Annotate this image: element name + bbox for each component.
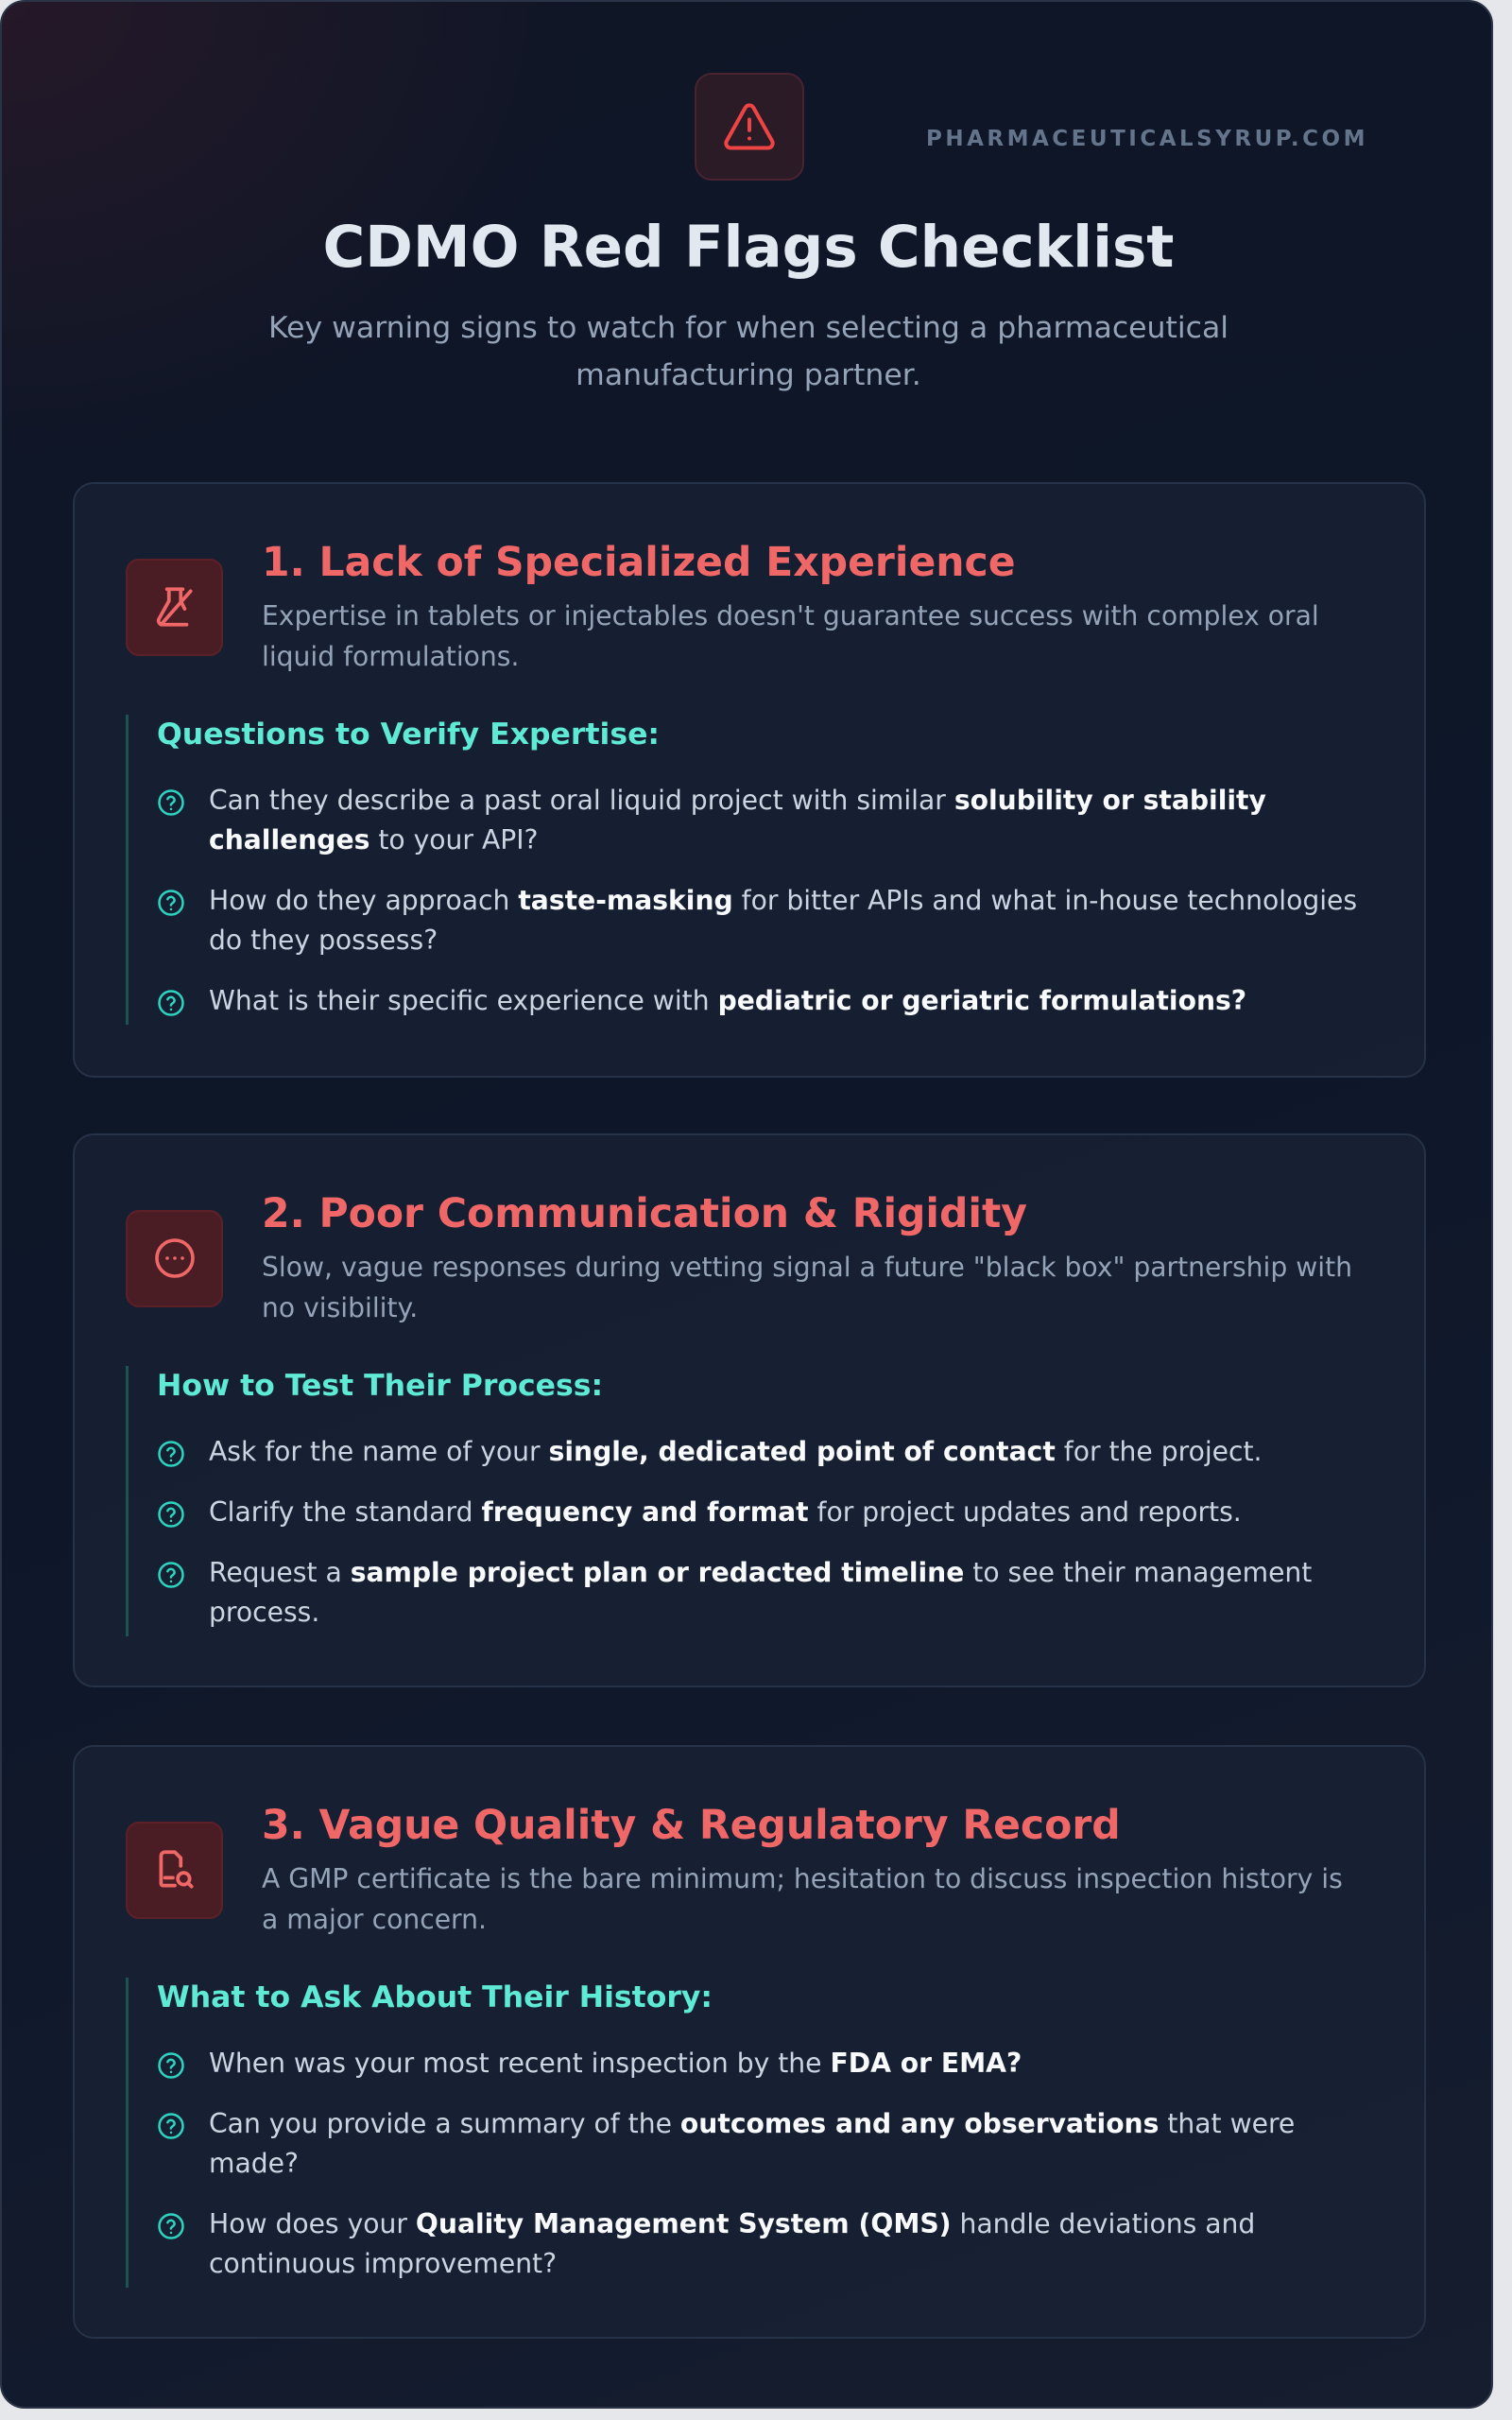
- panel: card 2: [73, 1133, 1426, 1687]
- questions block 1: Questions to Verify Expertise:: [157, 717, 660, 752]
- card 2 header: Slow, vague responses during vetting signal a future "black box" partnership with no visibility.: [262, 1252, 1352, 1323]
- questions block 3: What to Ask About Their History:: [157, 1980, 713, 2014]
- questions block 1: What is their specific experience with pediatric or geriatric formulations?: [209, 985, 1246, 1016]
- card 3 header: [126, 1803, 1343, 1935]
- card 2 header: 2. Poor Communication & Rigidity: [262, 1191, 1027, 1237]
- icon: document search: [126, 1821, 223, 1919]
- questions block 2: Ask for the name of your single, dedicated point of contact for the project.: [209, 1436, 1263, 1467]
- questions block 3: When was your most recent inspection by the FDA or EMA?: [209, 2048, 1022, 2079]
- questions block 2: Clarify the standard frequency and format for project updates and reports.: [209, 1496, 1242, 1528]
- questions block 3: Can you provide a summary of the outcomes and any observations that were made?: [209, 2108, 1295, 2179]
- icon: flask crossed: [126, 558, 223, 656]
- card 2 header: [126, 1191, 1352, 1323]
- questions block 3: [126, 1978, 1366, 2288]
- card 3 header: 3. Vague Quality & Regulatory Record: [262, 1803, 1121, 1849]
- questions block 1: [126, 715, 1366, 1025]
- site name: PHARMACEUTICALSYRUP.COM: [926, 127, 1368, 151]
- questions block 2: [126, 1366, 1366, 1636]
- card 1 header: [126, 540, 1319, 672]
- subtitle: Key warning signs to watch for when selecting a pharmaceutical manufacturing partner.: [268, 311, 1228, 392]
- panel: card 3: [73, 1745, 1426, 2339]
- questions block 1: Can they describe a past oral liquid project with similar solubility or stability challenges to your API?: [209, 785, 1266, 856]
- card 3 header: A GMP certificate is the bare minimum; hesitation to discuss inspection history is a major concern.: [262, 1863, 1343, 1935]
- title: CDMO Red Flags Checklist: [323, 214, 1174, 281]
- questions block 2: Request a sample project plan or redacted timeline to see their management process.: [209, 1557, 1312, 1628]
- questions block 2: How to Test Their Process:: [157, 1369, 603, 1403]
- questions block 3: How does your Quality Management System (QMS) handle deviations and continuous improvement?: [209, 2208, 1255, 2279]
- card 1 header: 1. Lack of Specialized Experience: [262, 540, 1016, 586]
- questions block 1: How do they approach taste-masking for bitter APIs and what in-house technologies do they possess?: [209, 885, 1357, 956]
- icon: chat bubble: [126, 1210, 223, 1306]
- icon: warning triangle: [695, 73, 804, 181]
- panel: card 1: [73, 482, 1426, 1078]
- card 1 header: Expertise in tablets or injectables doesn't guarantee success with complex oral liquid formulations.: [262, 600, 1319, 672]
